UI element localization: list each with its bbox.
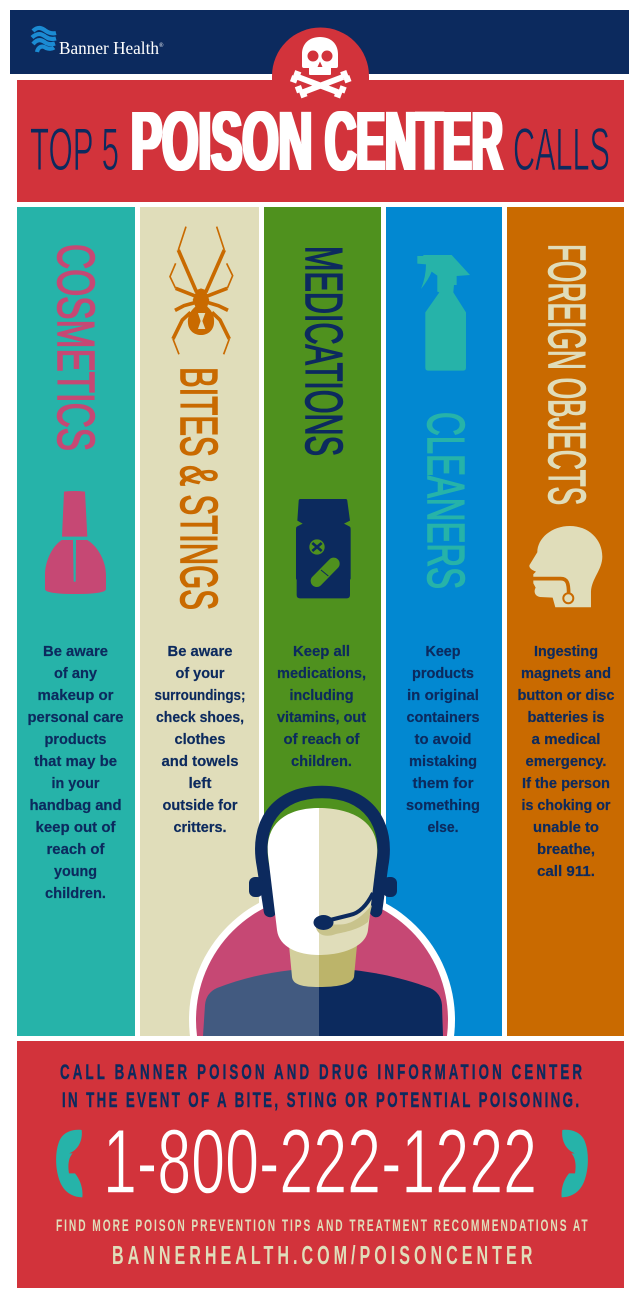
text: foreign objects advice: Ingesting — [534, 643, 598, 660]
text: foreign objects advice: call 911. — [537, 863, 595, 880]
icon: skull and crossbones — [290, 37, 351, 98]
panel: cleaners — [386, 207, 502, 1036]
header bar — [10, 10, 629, 74]
heading: cleaners: CLEANERS — [416, 412, 474, 589]
microphone shadow — [316, 905, 372, 936]
icon: phone left — [56, 1130, 83, 1197]
text: bites advice: critters. — [174, 819, 226, 836]
text: medications advice: vitamins, out — [277, 709, 366, 726]
panel: foreign objects — [507, 207, 624, 1036]
text: cosmetics advice: in your — [52, 775, 100, 792]
text: foreign objects advice: breathe, — [537, 841, 595, 858]
text: bites advice — [154, 643, 246, 836]
text: foreign objects advice: button or disc — [518, 687, 614, 704]
text: cosmetics advice: young — [54, 863, 97, 880]
text: foreign objects advice — [518, 643, 614, 880]
title: top 5: TOP 5 — [30, 117, 119, 184]
text: medications advice: of reach of — [284, 731, 360, 748]
text: cosmetics advice: of any — [54, 665, 98, 682]
text: cosmetics advice: keep out of — [36, 819, 116, 836]
heading line 2: IN THE EVENT OF A BITE, STING OR POTENTIAL POISONING. — [62, 1088, 579, 1112]
icon: logo waves — [32, 28, 56, 52]
icon: phone right — [561, 1130, 588, 1197]
skull — [302, 37, 338, 75]
logo wordmark: Banner Health — [59, 38, 159, 58]
illustration: call center operator — [189, 786, 455, 1036]
text: cleaners advice: else. — [428, 819, 458, 836]
panel: cosmetics — [17, 207, 135, 1036]
heading: bites and stings: BITES & STINGS — [169, 367, 227, 610]
pill — [317, 564, 334, 581]
text: foreign objects advice: a medical — [532, 731, 600, 748]
text: cosmetics advice: handbag and — [30, 797, 122, 814]
icon: head and throat — [529, 526, 602, 607]
text: bites advice: check shoes, — [156, 709, 244, 726]
heading: foreign objects: FOREIGN OBJECTS — [537, 244, 595, 505]
shirt — [203, 970, 443, 1036]
title banner — [17, 80, 624, 202]
cross badge — [309, 539, 325, 555]
text: cleaners advice: in original — [407, 687, 479, 704]
column background — [264, 207, 381, 1036]
text: cosmetics advice: products — [44, 731, 106, 748]
neck — [289, 945, 357, 987]
icon: medicine bottle — [296, 499, 351, 598]
text: cleaners advice: them for — [412, 775, 474, 792]
title: calls: CALLS — [513, 117, 610, 184]
text: medications advice: including — [290, 687, 354, 704]
text: cosmetics advice: personal care — [28, 709, 124, 726]
text: bites advice: Be aware — [168, 643, 232, 660]
text: cosmetics advice: children. — [45, 885, 106, 902]
hourglass marking — [198, 313, 205, 329]
text: foreign objects advice: unable to — [533, 819, 599, 836]
text: cleaners advice: mistaking — [409, 753, 477, 770]
text: medications advice — [277, 643, 366, 770]
text: bites advice: and towels — [162, 753, 238, 770]
column background — [17, 207, 135, 1036]
text: medications advice: Keep all — [293, 643, 350, 660]
heading line 1: CALL BANNER POISON AND DRUG INFORMATION CENTER — [60, 1060, 582, 1084]
column background — [386, 207, 502, 1036]
face — [268, 808, 377, 955]
background — [17, 1041, 624, 1288]
text: foreign objects advice: emergency. — [526, 753, 606, 770]
icon: nail polish — [45, 491, 106, 594]
text: foreign objects advice: magnets and — [521, 665, 611, 682]
text: medications advice: children. — [291, 753, 352, 770]
text: bites advice: outside for — [162, 797, 238, 814]
spider leg bases — [173, 250, 229, 339]
text: cosmetics advice: that may be — [34, 753, 117, 770]
logo registered mark: ® — [159, 42, 164, 49]
spider body — [188, 288, 214, 335]
text: bites advice: surroundings; — [154, 687, 246, 704]
panel: call to action — [17, 1041, 624, 1288]
text: cleaners advice — [406, 643, 480, 836]
text: bites advice: of your — [176, 665, 225, 682]
headset band and ear cups — [249, 792, 397, 911]
find more line: FIND MORE POISON PREVENTION TIPS AND TREATMENT RECOMMENDATIONS AT — [56, 1215, 588, 1235]
microphone — [314, 893, 373, 930]
text: cosmetics advice: makeup or — [38, 687, 114, 704]
spider leg tips — [170, 227, 233, 354]
panel: bites and stings — [140, 207, 259, 1036]
text: bites advice: clothes — [174, 731, 226, 748]
text: cleaners advice: Keep — [426, 643, 460, 660]
text: cleaners advice: something — [406, 797, 480, 814]
text: foreign objects advice: is choking or — [522, 797, 611, 814]
icon: spider — [170, 227, 233, 354]
title: center: CENTER — [325, 96, 503, 189]
text: cosmetics advice: reach of — [46, 841, 105, 858]
text: cosmetics advice — [28, 643, 124, 902]
title text — [30, 96, 610, 189]
text: cleaners advice: containers — [406, 709, 480, 726]
crossbones — [290, 70, 351, 98]
website url: BANNERHEALTH.COM/POISONCENTER — [112, 1240, 533, 1270]
phone number: 1-800-222-1222 — [103, 1109, 537, 1213]
text: cleaners advice: to avoid — [414, 731, 472, 748]
column background — [140, 207, 259, 1036]
skull arch — [272, 27, 369, 80]
text: cosmetics advice: Be aware — [43, 643, 108, 660]
heading: cosmetics: COSMETICS — [46, 244, 104, 451]
logo: Banner Health — [32, 28, 164, 58]
panel: medications — [264, 207, 381, 1036]
icon: spray bottle — [417, 255, 470, 371]
column background — [507, 207, 624, 1036]
text: foreign objects advice: If the person — [522, 775, 610, 792]
heading: medications: MEDICATIONS — [294, 246, 352, 456]
circle backdrop — [189, 903, 455, 1036]
title: poison: POISON — [131, 96, 312, 189]
text: bites advice: left — [188, 775, 212, 792]
text: medications advice: medications, — [277, 665, 366, 682]
text: cleaners advice: products — [412, 665, 474, 682]
text: foreign objects advice: batteries is — [528, 709, 604, 726]
